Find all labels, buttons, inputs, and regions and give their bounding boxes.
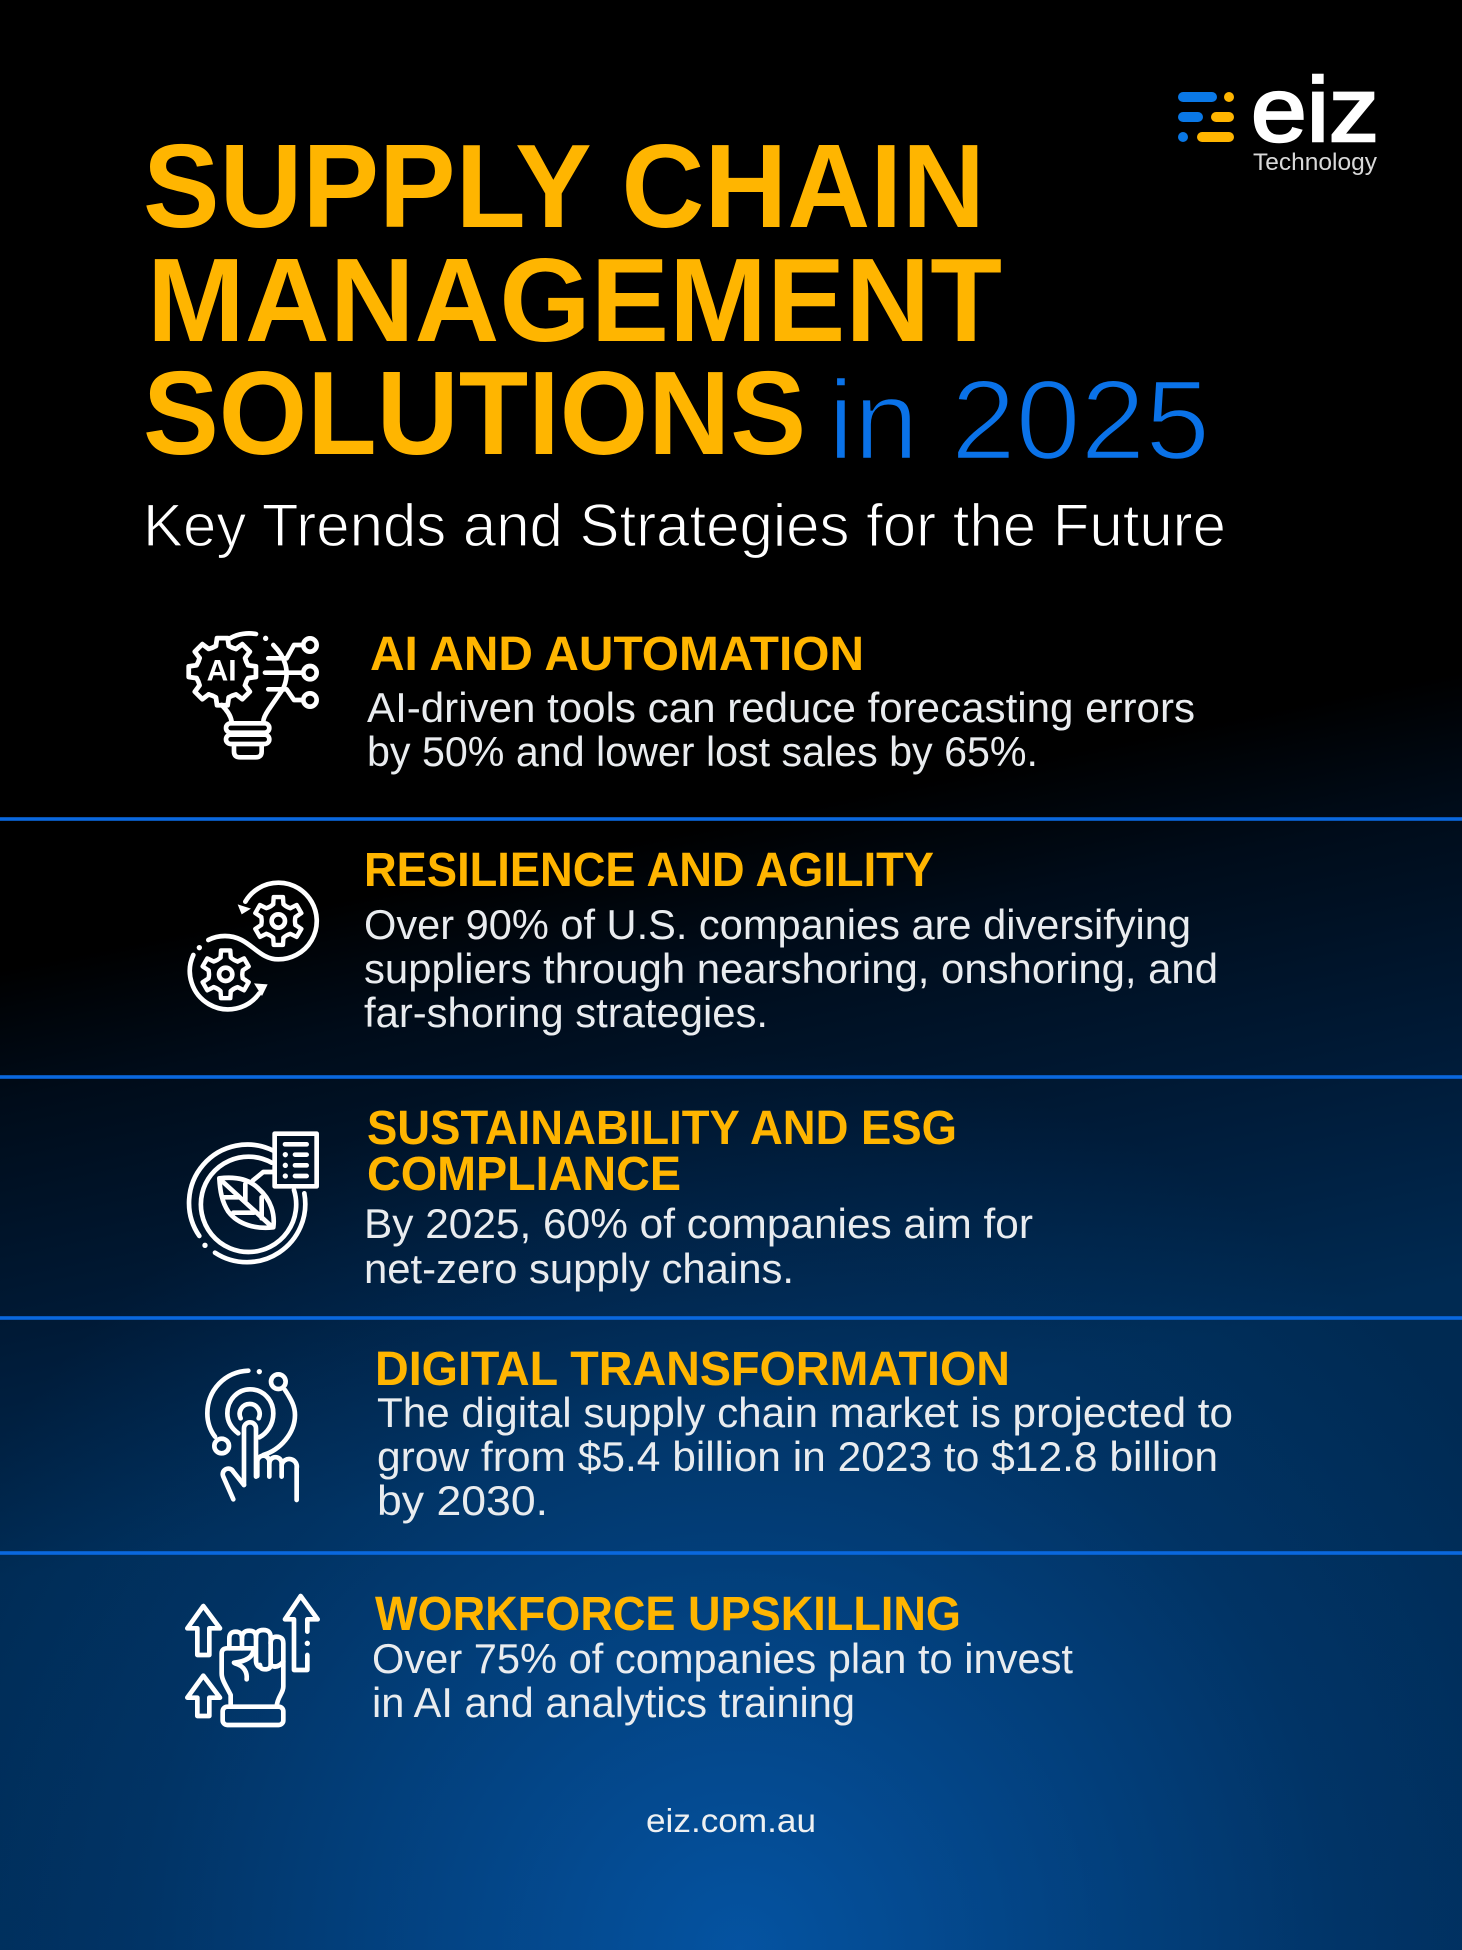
description: in AI and analytics training [372,1679,855,1726]
panel: Resilience and Agility [190,844,1218,1036]
description: grow from $5.4 billion in 2023 to $12.8 billion [377,1433,1218,1480]
title [143,120,1210,483]
panel: Workforce Upskilling [187,1588,1073,1726]
icon: fist with arrows [187,1596,318,1725]
subtitle: Key Trends and Strategies for the Future [143,492,1226,559]
icon: finger touching target [207,1369,297,1500]
heading: AI AND AUTOMATION [370,628,864,681]
description: net-zero supply chains. [364,1245,794,1292]
description: By 2025, 60% of companies aim for [364,1200,1033,1247]
icon: AI light bulb: AI [207,655,237,688]
heading: COMPLIANCE [367,1148,681,1201]
icon: leaf and report [189,1134,317,1262]
description [364,901,1218,1036]
icon: AI light bulb [189,633,317,757]
description: by 50% and lower lost sales by 65%. [367,728,1038,775]
heading: WORKFORCE UPSKILLING [375,1588,961,1641]
heading: DIGITAL TRANSFORMATION [375,1343,1010,1396]
footer url: eiz.com.au [646,1802,816,1839]
title: in 2025 [828,357,1210,483]
description [367,684,1195,775]
logo mark [1178,92,1234,142]
description: suppliers through nearshoring, onshoring, and [364,945,1218,992]
icon: rotating gears [190,883,317,1009]
description: by 2030. [377,1477,548,1524]
logo: eiz Technology [1178,60,1379,176]
title: SUPPLY CHAIN [143,120,985,253]
description: AI-driven tools can reduce forecasting errors [367,684,1195,731]
heading: RESILIENCE AND AGILITY [364,844,934,897]
title: SOLUTIONS [143,347,806,480]
description [377,1389,1233,1524]
description: Over 90% of U.S. companies are diversifying [364,901,1191,948]
panel: Sustainability and ESG Compliance [189,1102,1033,1292]
heading [367,1102,957,1201]
title: MANAGEMENT [147,234,1002,367]
logo wordmark: eiz [1251,60,1379,161]
panel: Digital Transformation [207,1343,1233,1524]
description: Over 75% of companies plan to invest [372,1635,1073,1682]
description [372,1635,1073,1726]
description: far-shoring strategies. [364,989,768,1036]
description: The digital supply chain market is projected to [377,1389,1233,1436]
description [364,1200,1033,1292]
panel: AI and Automation [189,628,1195,775]
logo tagline: Technology [1253,149,1377,176]
heading: SUSTAINABILITY AND ESG [367,1102,957,1155]
